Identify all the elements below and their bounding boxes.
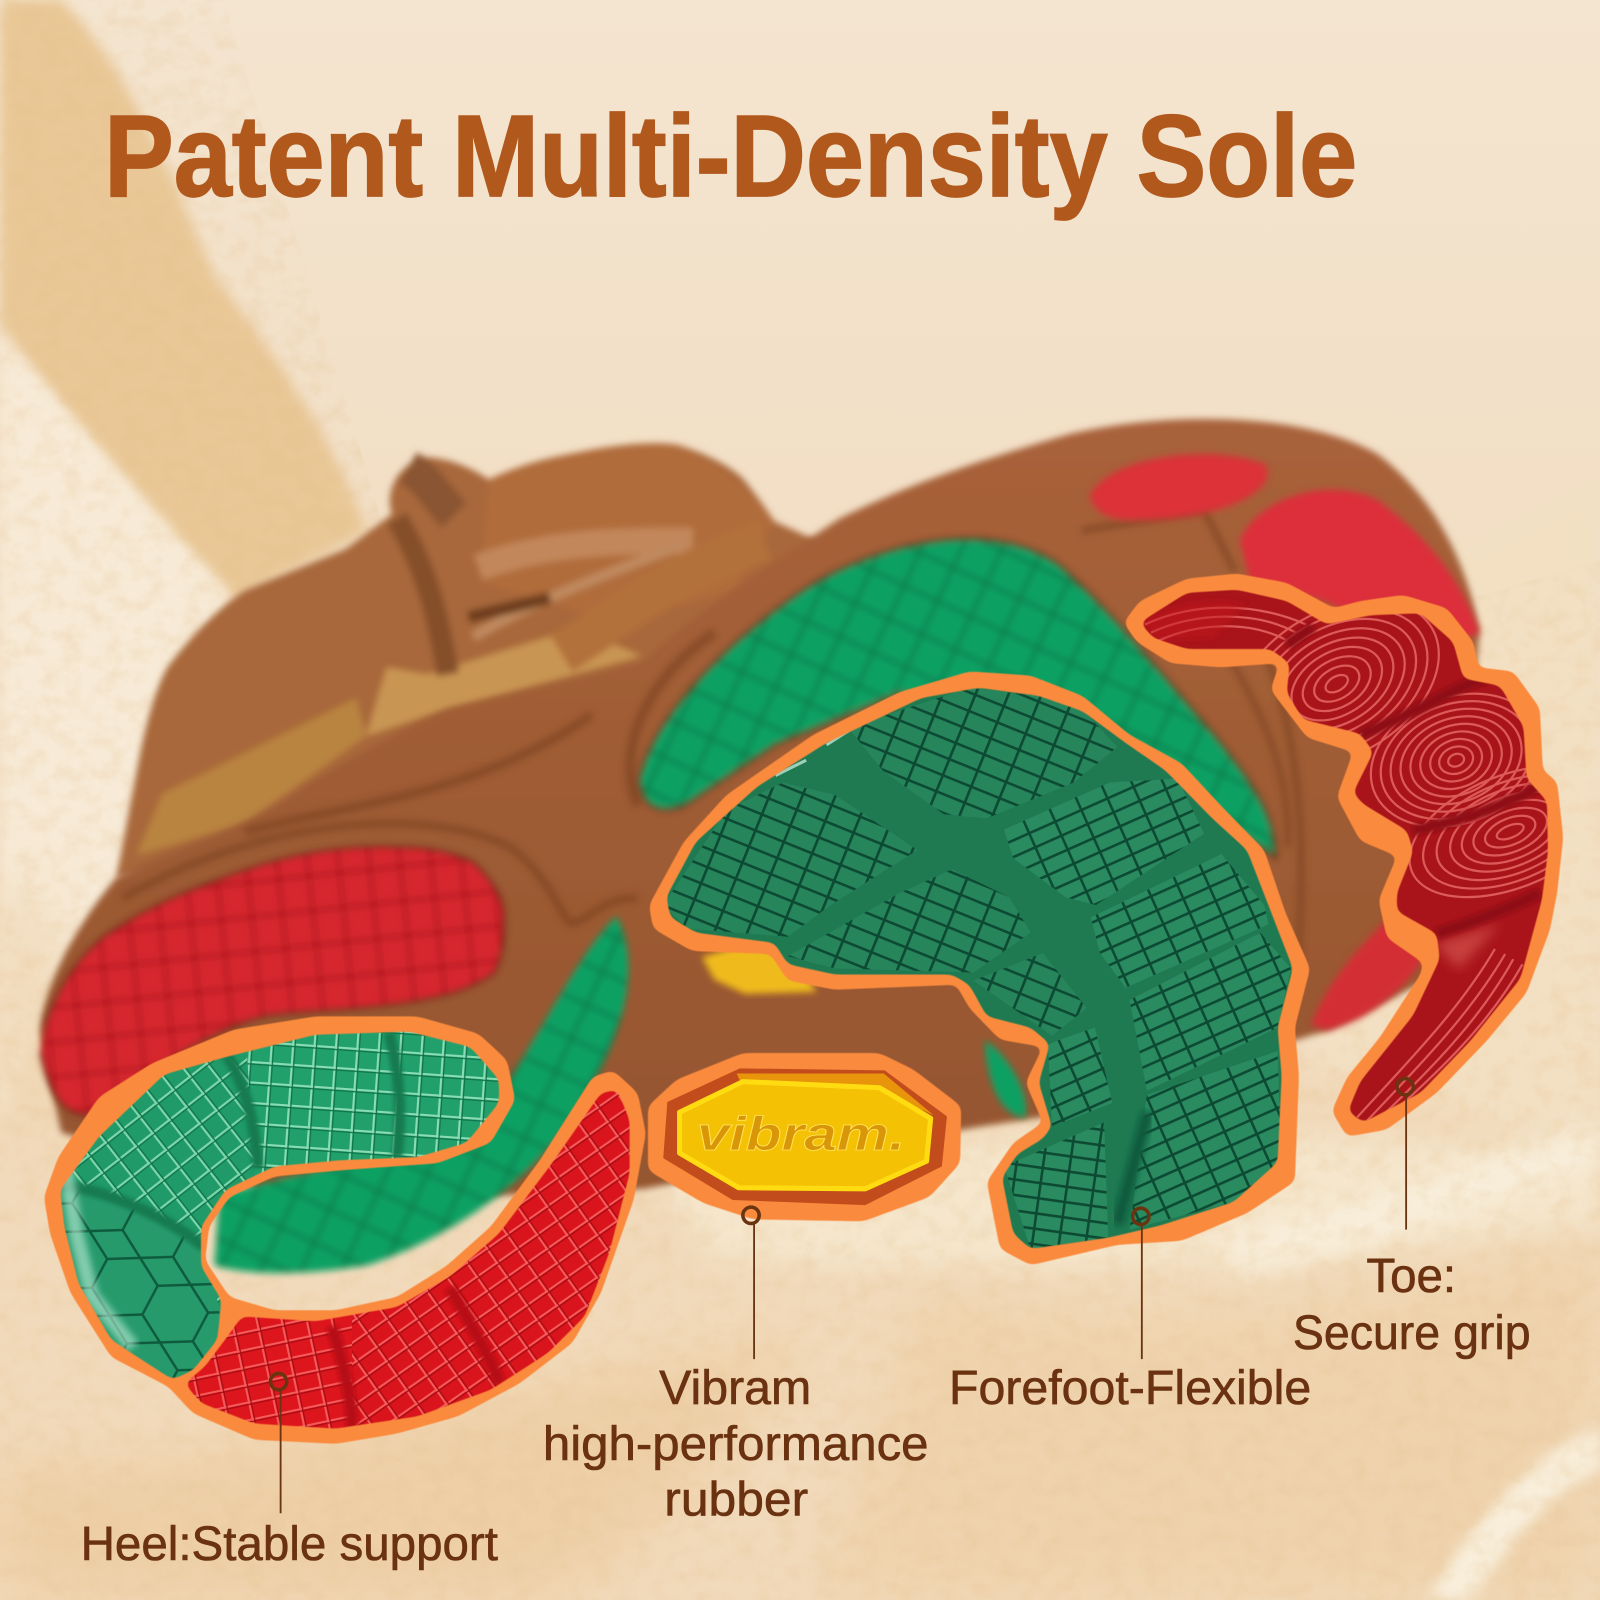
blurred heel pad in red	[41, 847, 505, 1115]
heel green section	[60, 1031, 500, 1378]
tread block: upper right	[1004, 779, 1204, 905]
label: vibram rubber: rubber	[664, 1473, 808, 1526]
blurred green forefoot pad	[639, 539, 1276, 857]
label: vibram rubber: high-performance	[543, 1418, 929, 1471]
callout: vibram marker	[743, 1207, 759, 1359]
blurred sole ribs	[122, 510, 1301, 980]
tread block: centre low	[1048, 1028, 1112, 1127]
tread block: left	[663, 783, 917, 937]
heel red section	[187, 1090, 630, 1429]
tread block: middle left	[788, 869, 1031, 972]
callout: forefoot marker	[1133, 1208, 1149, 1359]
tread block: lower right	[1130, 933, 1291, 1091]
vibram octagon base	[663, 1068, 947, 1205]
blurred boot behind the sole pieces	[40, 419, 1480, 1273]
vibram logo piece	[648, 1053, 961, 1221]
boot sole	[40, 419, 1480, 1204]
vibram orange outline	[648, 1053, 961, 1221]
label: heel: Heel:Stable support	[81, 1518, 498, 1571]
forefoot sole piece	[649, 671, 1310, 1265]
vibram yellow octagon	[680, 1082, 931, 1189]
label: forefoot: Forefoot-Flexible	[949, 1362, 1311, 1415]
callout: toe marker	[1397, 1079, 1413, 1230]
label: toe: Toe:	[1366, 1250, 1456, 1303]
toe sole piece	[1122, 566, 1600, 1143]
blurred toe pads	[1090, 454, 1480, 1031]
boot upper in suede	[116, 443, 840, 878]
callout: heel marker	[270, 1373, 287, 1513]
vibram chamfer	[737, 1073, 934, 1115]
toe red tread with fingerprint ridges	[1122, 566, 1600, 1143]
label: toe: Secure grip	[1293, 1307, 1531, 1360]
blurred green arch pad	[214, 916, 628, 1273]
tread block: heel side	[1004, 1122, 1108, 1249]
tread block: top	[848, 688, 1117, 818]
tread block: centre	[973, 953, 1087, 1036]
title: Patent Multi-Density Sole	[104, 91, 1357, 221]
label: toe	[1293, 1250, 1531, 1360]
heel sole piece	[41, 1016, 646, 1444]
label: vibram rubber: Vibram	[659, 1362, 811, 1415]
forefoot green tread	[653, 673, 1306, 1265]
tread block: bottom right	[1130, 1051, 1282, 1230]
forefoot orange outline	[649, 671, 1310, 1265]
toe orange outline	[1123, 573, 1563, 1137]
heel orange outline	[44, 1016, 646, 1444]
blurred yellow logo	[702, 944, 816, 994]
label: vibram rubber	[543, 1362, 929, 1526]
vibram lettering: vibram.	[697, 1108, 905, 1160]
tread block: middle right	[1091, 854, 1268, 988]
